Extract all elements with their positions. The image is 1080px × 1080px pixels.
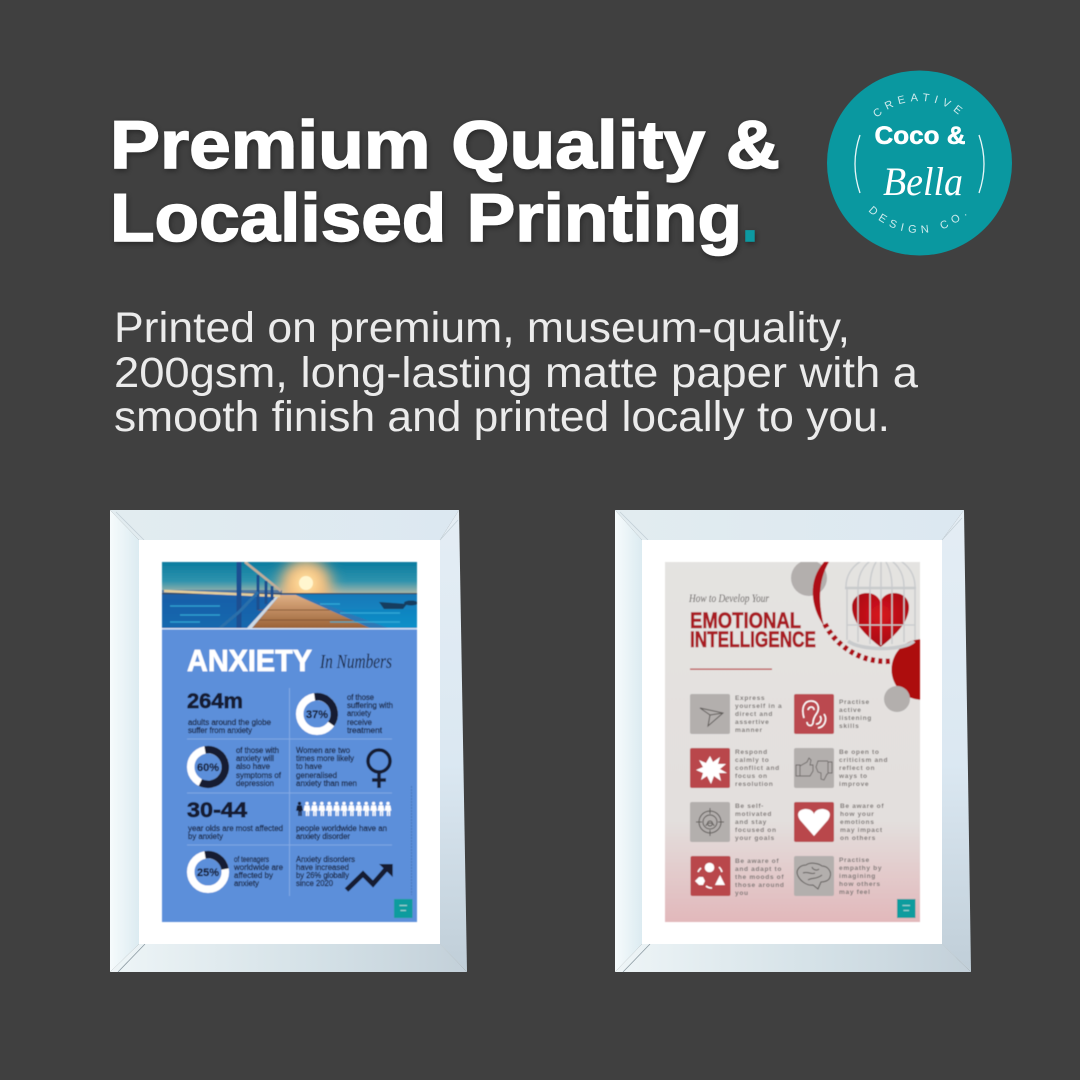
tip 3: respond calmly: calmly to	[735, 757, 769, 764]
tip 5: self-motivated: and stay	[735, 819, 767, 826]
tip 2: active listening: active	[839, 707, 862, 714]
icon: female symbol	[368, 750, 390, 788]
tip 3: respond calmly: conflict and	[735, 765, 780, 772]
icon: bird cage	[845, 556, 916, 648]
stat: women: anxiety than men	[296, 779, 357, 788]
stat: 37% donut: of those	[347, 693, 375, 702]
tip 8: empathy: imagining	[839, 873, 876, 880]
poster heading: ANXIETY	[187, 643, 312, 678]
stat: 25% donut: anxiety	[234, 879, 259, 888]
tip 1: express yourself	[690, 694, 782, 734]
stat: 60% donut: also have	[236, 762, 271, 771]
stat: 264m	[187, 690, 272, 735]
stat: 37% donut: receive	[347, 718, 373, 727]
stat: people worldwide: anxiety disorder	[296, 832, 350, 841]
stat: 37% donut: treatment	[347, 726, 383, 735]
tip 7: moods of others: the moods of	[735, 874, 784, 881]
tip 3: respond calmly: focus on	[735, 773, 768, 780]
tip 2: active listening: listening	[839, 715, 872, 722]
stat: women: generalised	[296, 771, 337, 780]
icon: target	[696, 808, 724, 836]
poster: emotional intelligence	[664, 561, 921, 922]
stat: women: to have	[296, 762, 323, 771]
tip 7: moods of others: those around	[735, 882, 785, 889]
tip 6: aware of emotions	[794, 802, 884, 842]
tip 4: open to criticism: ways to	[838, 773, 868, 780]
stat: 60% donut: 60%	[197, 762, 219, 774]
small logo mark	[394, 899, 412, 918]
logo badge: Bella	[883, 159, 963, 204]
tip 3: respond calmly: resolution	[735, 781, 773, 788]
icon: rising arrow	[346, 864, 393, 890]
poster heading: INTELLIGENCE	[690, 627, 816, 652]
stat: 30-44: year olds are most affected	[188, 824, 283, 833]
stat: 25% donut: worldwide are	[233, 863, 284, 872]
stat: 60% donut: symptoms of	[236, 771, 282, 780]
icon: ear	[803, 701, 826, 728]
tip 2: active listening: Practise	[839, 699, 870, 706]
tip 6: aware of emotions: on others	[840, 835, 876, 842]
stat: 30-44: by anxiety	[188, 832, 223, 841]
tip 8: empathy	[794, 856, 882, 896]
stat: 25% donut: 25%	[197, 867, 219, 879]
title	[110, 107, 780, 256]
tip 1: express yourself: manner	[735, 727, 763, 734]
stat: growth	[296, 855, 393, 890]
blue panel	[162, 630, 417, 922]
stat: 264m: suffer from anxiety	[188, 726, 252, 735]
frame: left poster	[110, 510, 467, 972]
icon: shapes in a cycle	[695, 863, 725, 888]
stat: 25% donut: affected by	[234, 871, 273, 880]
tip 2: active listening: skills	[839, 723, 859, 730]
poster heading: How to Develop Your	[688, 591, 769, 605]
stat: people worldwide	[296, 802, 391, 841]
stat: growth: since 2020	[296, 879, 334, 888]
icon: row of people	[296, 802, 391, 816]
frame: right poster	[615, 510, 971, 972]
tip 4: open to criticism	[794, 748, 888, 788]
tip 5: self-motivated: focused on	[735, 827, 777, 834]
tip 6: aware of emotions: may impact	[840, 827, 883, 834]
icon: heart	[852, 593, 909, 647]
logo badge: DESIGN CO.	[868, 206, 966, 234]
title: Localised Printing	[110, 180, 742, 256]
tip 6: aware of emotions: Be aware of	[840, 803, 884, 810]
tip 1: express yourself: yourself in a	[735, 703, 782, 710]
poster heading: In Numbers	[319, 651, 392, 673]
tip 4: open to criticism: reflect on	[839, 765, 875, 772]
description text	[114, 304, 918, 441]
tip 3: respond calmly: Respond	[735, 749, 768, 756]
description text: 200gsm, long-lasting matte paper with a	[114, 349, 918, 397]
poster heading	[187, 643, 392, 678]
stat: growth: Anxiety disorders	[296, 855, 355, 864]
tip 7: moods of others: Be aware of	[735, 858, 779, 865]
stat: 25% donut: of teenagers	[234, 855, 269, 864]
stat: people worldwide: people worldwide have an	[296, 824, 387, 833]
tip 7: moods of others	[690, 856, 785, 897]
tip 8: empathy: empathy by	[839, 865, 882, 872]
icon: brain	[797, 863, 831, 889]
tip 2: active listening	[794, 694, 872, 734]
stat: 264m: adults around the globe	[188, 718, 272, 727]
tip 1: express yourself: direct and	[735, 711, 773, 718]
tip 5: self-motivated: Be self-	[735, 803, 764, 810]
stat: 37% donut: 37%	[306, 709, 328, 721]
stat: 30-44	[187, 799, 283, 841]
tip 3: respond calmly	[690, 748, 780, 788]
icon: burst	[696, 756, 727, 784]
tip 8: empathy: Practise	[839, 857, 870, 864]
stat: 60% donut: depression	[236, 779, 274, 788]
icon: thumbs up and down	[796, 758, 832, 780]
poster heading	[688, 591, 816, 652]
stat: 264m: 264m	[187, 690, 243, 713]
stat: growth: by 26% globally	[296, 871, 349, 880]
icon: white heart	[798, 809, 830, 836]
stat: women: Women are two	[296, 746, 351, 755]
stat: 60% donut: of those with	[236, 746, 279, 755]
tip 7: moods of others: you	[735, 890, 749, 897]
title: Premium Quality &	[110, 107, 780, 183]
tip 5: self-motivated: your goals	[735, 835, 775, 842]
description text: Printed on premium, museum-quality,	[114, 304, 850, 352]
tip 7: moods of others: and adapt to	[735, 866, 782, 873]
photo: pier at sunset	[162, 559, 418, 629]
tip 8: empathy: may feel	[839, 889, 871, 896]
small logo mark	[897, 899, 916, 918]
poster: anxiety in numbers	[162, 559, 418, 922]
stat: 37% donut: anxiety	[347, 709, 371, 718]
tip 4: open to criticism: Be open to	[839, 749, 880, 756]
tip 8: empathy: how others	[839, 881, 881, 888]
stat: 60% donut: anxiety will	[236, 754, 274, 763]
title: .	[742, 180, 758, 256]
tip 6: aware of emotions: emotions	[840, 819, 875, 826]
stat: 60% donut	[188, 746, 282, 788]
tip 5: self-motivated: motivated	[735, 811, 772, 818]
stat: 25% donut	[188, 852, 284, 892]
tip 1: express yourself: Express	[735, 695, 765, 702]
icon: paper plane	[700, 708, 723, 726]
logo badge: Coco &	[874, 122, 966, 150]
stat: growth: have increased	[296, 863, 349, 872]
poster heading: EMOTIONAL	[690, 608, 801, 633]
stat: women	[296, 746, 390, 788]
stat: women: times more likely	[296, 754, 354, 763]
tip 1: express yourself: assertive	[735, 719, 769, 726]
stat: 30-44: 30-44	[187, 799, 247, 822]
description text: smooth finish and printed locally to you.	[114, 393, 890, 441]
stat: 37% donut	[297, 693, 393, 735]
decorative graphics: circles, ring, caged heart	[790, 561, 921, 712]
stat: 37% donut: suffering with	[347, 701, 393, 710]
tip 4: open to criticism: criticism and	[839, 757, 888, 764]
logo badge	[827, 70, 1012, 256]
tip 5: self-motivated	[690, 802, 777, 842]
logo badge: CREATIVE	[874, 93, 963, 116]
tip 6: aware of emotions: how your	[840, 811, 875, 818]
tip 4: open to criticism: improve	[839, 781, 869, 788]
